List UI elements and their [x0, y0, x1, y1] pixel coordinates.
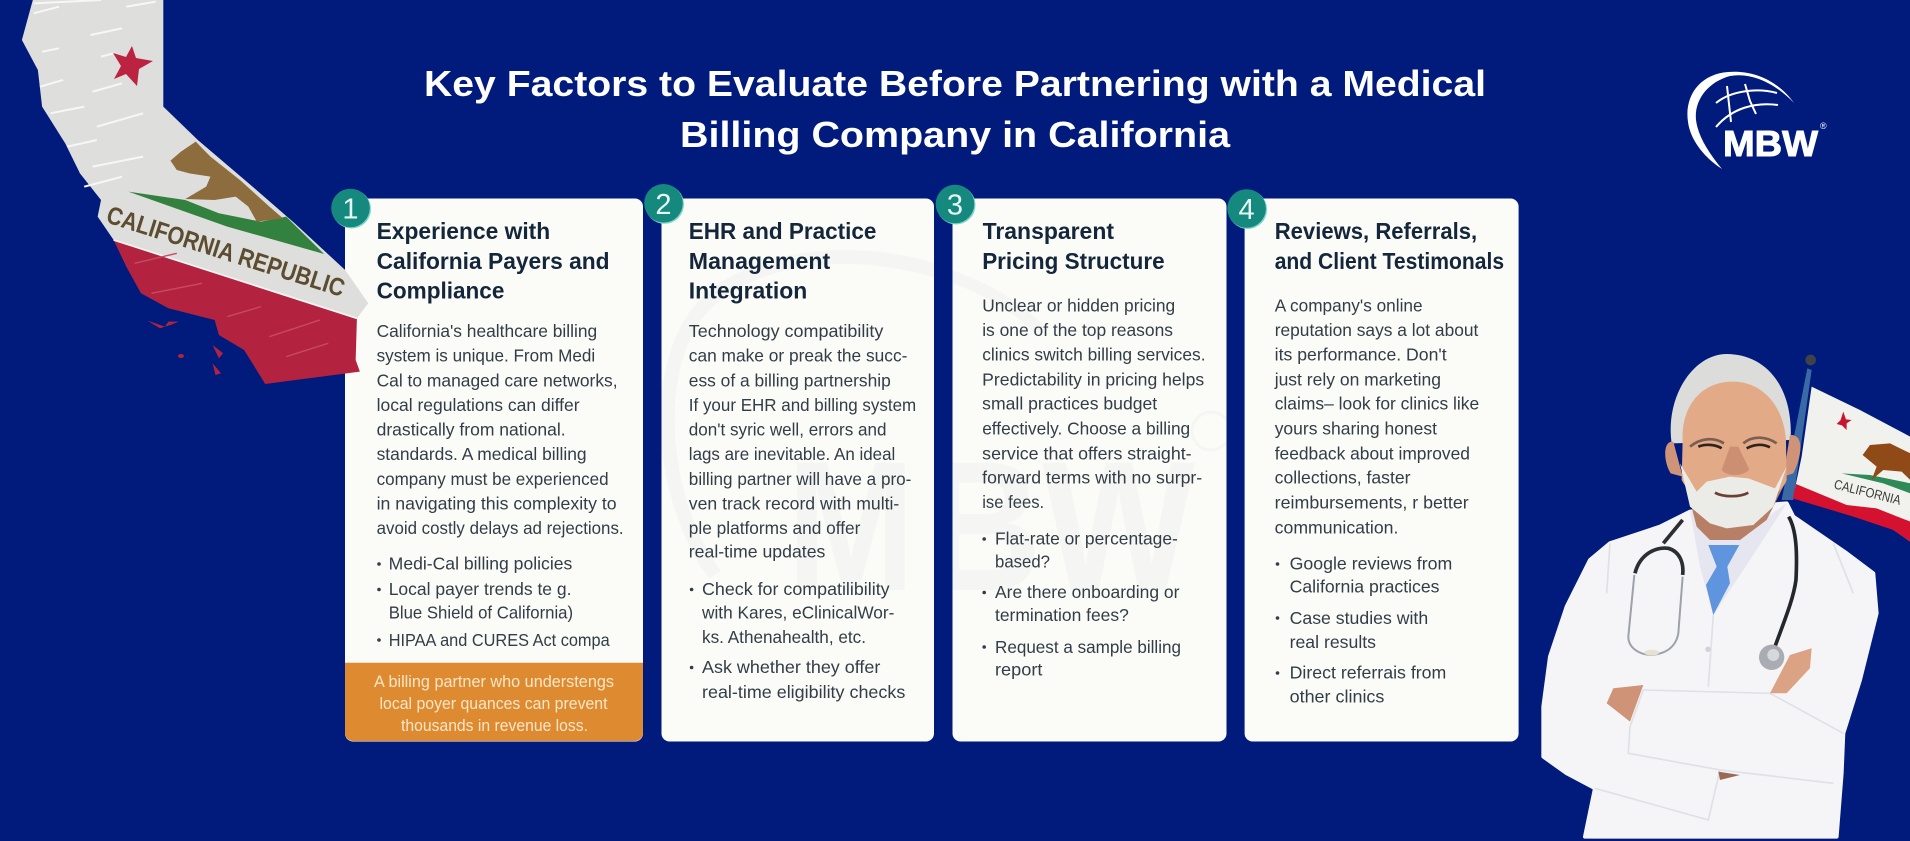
- heading: and Client Testimonals: [1275, 248, 1504, 274]
- lab coat: [1543, 503, 1877, 837]
- heading: California Payers and: [377, 248, 610, 274]
- logo: MBW: [1687, 72, 1827, 169]
- bullet list: Blue Shield of California): [389, 602, 573, 622]
- body text: Predictability in pricing helps: [982, 369, 1204, 389]
- bullet list: with Kares, eClinicalWor-: [701, 602, 895, 622]
- body text: company must be experienced: [377, 469, 609, 489]
- bullet list: real-time eligibility checks: [702, 682, 906, 702]
- body text: lags are inevitable. An ideal: [689, 444, 895, 464]
- stethoscope: [1628, 517, 1797, 655]
- panel: EHR and practice management: [662, 198, 940, 742]
- badge 2: 2: [655, 189, 672, 221]
- panel: experience with California payers: [345, 198, 643, 742]
- illustration: doctor: [1543, 354, 1877, 837]
- heading: Pricing Structure: [982, 248, 1165, 274]
- bullet list: Are there onboarding or: [995, 582, 1180, 602]
- title: [424, 63, 1486, 155]
- bullet list: Ask whether they offer: [702, 657, 881, 677]
- shirt: [1690, 503, 1787, 615]
- body text: ess of a billing partnership: [689, 370, 891, 390]
- bullet list: Case studies with: [1290, 608, 1428, 628]
- heading: [377, 218, 610, 303]
- nose: [1722, 447, 1749, 475]
- bullet list: [982, 528, 1181, 680]
- bullet list: [377, 554, 610, 650]
- beard: [1680, 463, 1787, 528]
- body text: collections, faster: [1275, 468, 1411, 488]
- watermark: right part of logo: BW: [925, 424, 1195, 630]
- badge 2: [644, 184, 684, 224]
- body text: real-time updates: [689, 541, 826, 561]
- badge 1: 1: [342, 194, 359, 226]
- body text: [377, 321, 624, 538]
- badge 1: [331, 189, 371, 228]
- body text: Technology compatibility: [689, 321, 884, 341]
- heading: Management: [689, 248, 830, 274]
- heading: [689, 218, 876, 303]
- body text: A company's online: [1275, 295, 1423, 315]
- body text: feedback about improved: [1275, 443, 1470, 463]
- body text: avoid costly delays ad rejections.: [377, 518, 624, 538]
- body text: drastically from national.: [377, 419, 566, 439]
- body text: California's healthcare billing: [377, 321, 597, 341]
- bullet list: California practices: [1290, 576, 1440, 596]
- body text: service that offers straight-: [982, 443, 1192, 463]
- body text: clinics switch billing services.: [982, 344, 1206, 364]
- body text: claims– look for clinics like: [1275, 394, 1479, 414]
- illustration: California flag on pole: [1782, 355, 1910, 542]
- body text: If your EHR and billing system: [689, 395, 916, 415]
- body text: standards. A medical billing: [377, 444, 587, 464]
- map label: CALIFORNIA REPUBLIC: [103, 201, 348, 303]
- body text: communication.: [1275, 517, 1398, 537]
- watermark: right part of logo: [925, 276, 1230, 630]
- neck: [1691, 487, 1783, 540]
- bullet list: Flat-rate or percentage-: [995, 528, 1178, 548]
- tie: [1706, 545, 1739, 615]
- callout band: local poyer quances can prevent: [380, 694, 608, 713]
- body text: Cal to managed care networks,: [377, 370, 618, 390]
- body text: its performance. Don't: [1275, 344, 1447, 364]
- body text: just rely on marketing: [1274, 369, 1441, 389]
- watermark: left part of logo: M: [787, 424, 915, 630]
- callout band: [345, 663, 643, 741]
- bullet list: ks. Athenahealth, etc.: [702, 627, 866, 647]
- body text: is one of the top reasons: [982, 320, 1173, 340]
- callout band: thousands in revenue loss.: [401, 716, 588, 735]
- logo: MBW: ®: [1820, 121, 1827, 131]
- bullet list: other clinics: [1290, 686, 1385, 706]
- body text: billing partner will have a pro-: [689, 469, 912, 489]
- heading: Reviews, Referrals,: [1275, 218, 1477, 244]
- body text: small practices budget: [982, 394, 1157, 414]
- hands: [1607, 685, 1643, 722]
- body text: yours sharing honest: [1275, 418, 1437, 438]
- bullet list: HIPAA and CURES Act compa: [389, 630, 610, 650]
- body text: can make or preak the succ-: [689, 346, 908, 366]
- heading: Transparent: [983, 218, 1114, 244]
- body text: ple platforms and offer: [689, 518, 861, 538]
- body text: [1274, 295, 1479, 537]
- bullet list: based?: [995, 552, 1050, 572]
- body text: [982, 295, 1206, 512]
- title: Billing Company in California: [680, 114, 1231, 155]
- bullet list: Google reviews from: [1290, 554, 1452, 574]
- badge 4: [1227, 189, 1267, 229]
- hair: [1671, 354, 1791, 443]
- body text: reputation says a lot about: [1275, 320, 1479, 340]
- brows and eyes: [1690, 438, 1777, 448]
- face: [1682, 382, 1787, 505]
- body text: ise fees.: [982, 492, 1044, 512]
- heading: Experience with: [377, 218, 550, 244]
- heading: Integration: [689, 277, 807, 303]
- bullet list: termination fees?: [995, 605, 1129, 625]
- heading: [1275, 218, 1504, 274]
- bullet list: [690, 579, 906, 702]
- bullet list: [1276, 554, 1452, 706]
- body text: don't syric well, errors and: [689, 419, 886, 439]
- body text: ven track record with multi-: [689, 493, 899, 513]
- panel: reviews and referrals: [1245, 198, 1519, 742]
- icon: star: [113, 46, 153, 86]
- body text: [689, 321, 916, 561]
- heading: [982, 218, 1165, 274]
- bullet list: Request a sample billing: [995, 637, 1181, 657]
- bullet list: real results: [1290, 632, 1376, 652]
- bullet list: Medi-Cal billing policies: [389, 554, 573, 574]
- body text: reimbursements, r better: [1275, 492, 1469, 512]
- body text: effectively. Choose a billing: [982, 418, 1190, 438]
- body text: local regulations can differ: [377, 395, 580, 415]
- body text: forward terms with no surpr-: [982, 468, 1202, 488]
- heading: EHR and Practice: [689, 218, 876, 244]
- badge 4: 4: [1239, 194, 1255, 226]
- bullet list: report: [995, 660, 1043, 680]
- bullet list: Local payer trends te g.: [389, 579, 572, 599]
- heading: Compliance: [377, 277, 504, 303]
- ears: [1665, 435, 1800, 477]
- badge 3: [936, 185, 976, 224]
- title: Key Factors to Evaluate Before Partnering with a Medical: [424, 63, 1486, 104]
- bullet list: Check for compatilibility: [702, 579, 890, 599]
- body text: in navigating this complexity to: [377, 493, 617, 513]
- body text: system is unique. From Medi: [377, 346, 595, 366]
- icon: California flag map: [22, 0, 368, 384]
- callout band: A billing partner who understengs: [374, 672, 614, 691]
- panel: transparent pricing: [952, 198, 1226, 742]
- logo: MBW: MBW: [1723, 123, 1818, 164]
- body text: Unclear or hidden pricing: [982, 295, 1175, 315]
- bullet list: Direct referrais from: [1290, 663, 1446, 683]
- coat folds: [1595, 543, 1853, 820]
- badge 3: 3: [947, 190, 963, 222]
- watermark: left part of logo: [668, 257, 940, 630]
